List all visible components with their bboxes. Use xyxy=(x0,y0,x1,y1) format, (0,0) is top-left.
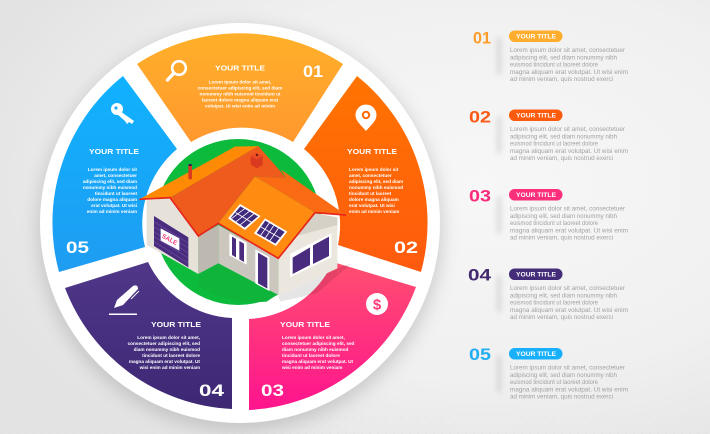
green lawn circle xyxy=(155,139,321,305)
body 03: tincidunt ut laoreet dolore xyxy=(282,353,340,358)
house illustration xyxy=(139,146,352,302)
text 02: Lorem ipsum dolor sit amet, consectetuer xyxy=(510,126,625,133)
front door xyxy=(255,249,269,291)
text 05 xyxy=(510,364,628,401)
right wall xyxy=(278,213,337,296)
text 03 xyxy=(510,206,628,242)
number 03: 03 xyxy=(261,381,284,400)
body 02 xyxy=(349,167,403,214)
garage door xyxy=(154,216,188,267)
number 04: 04 xyxy=(199,381,225,400)
dotted texture xyxy=(0,416,710,434)
body 04: consectetuer adipiscing elit, sed xyxy=(128,341,200,346)
number 02: 02 xyxy=(394,238,418,257)
vent pipe xyxy=(188,164,192,179)
text 02 xyxy=(510,126,628,162)
body 01: Lorem ipsum dolor sit amet, xyxy=(209,80,271,84)
divider shadow 02 xyxy=(498,117,500,153)
divider shadow 05 xyxy=(498,356,500,392)
text 05: Lorem ipsum dolor sit amet, consectetuer xyxy=(510,364,625,372)
divider shadow 01 xyxy=(498,38,500,74)
text 02: euismod tincidunt ut laoreet dolore xyxy=(510,141,599,148)
icon: dollar coin: $ xyxy=(373,296,382,314)
text 05: adipiscing elit, sed diam nonummy nibh xyxy=(510,372,618,379)
house shadow xyxy=(278,263,352,302)
front wall xyxy=(218,225,278,295)
roof right flap xyxy=(255,169,346,215)
pill 02 xyxy=(509,110,562,121)
segment 03 xyxy=(249,262,416,410)
icon: magnifier xyxy=(168,61,186,80)
number 05: 05 xyxy=(66,238,89,257)
sale sign xyxy=(160,228,179,251)
body 04: wisi enim ad minim veniam xyxy=(139,365,200,370)
body 02: erat volutpat. Ut wisi xyxy=(349,203,395,208)
text 02: magna aliquam erat volutpat. Ut wisi enim xyxy=(510,148,628,155)
item 01 xyxy=(473,28,628,83)
body 04: tincidunt ut laoreet dolore xyxy=(142,353,200,358)
item 02 xyxy=(469,108,628,162)
body 02: amet, consectetuer xyxy=(349,173,392,178)
number 01: 01 xyxy=(303,62,323,81)
text 03: magna aliquam erat volutpat. Ut wisi enim xyxy=(510,227,628,234)
text 03: ad minim veniam, quis nostrud exerci xyxy=(510,235,613,242)
front window xyxy=(229,233,247,265)
icon: dollar coin xyxy=(366,293,388,315)
wedge 02 xyxy=(304,76,428,272)
pill 04 xyxy=(509,268,562,280)
body 01 xyxy=(198,80,282,108)
divider shadow 04 xyxy=(498,276,500,312)
segment 01 xyxy=(137,33,343,142)
body 05: enim ad minim veniam xyxy=(87,209,137,214)
text 01: Lorem ipsum dolor sit amet, consectetuer xyxy=(510,47,625,54)
divider shadow 03 xyxy=(498,197,500,233)
pill 01: YOUR TITLE xyxy=(516,34,556,40)
roof red edge xyxy=(139,198,346,258)
text 02: ad minim veniam, quis nostrud exerci xyxy=(510,155,613,162)
text 03: Lorem ipsum dolor sit amet, consectetuer xyxy=(510,206,625,212)
body 01: volutpat. Ut wisi enim ad minim xyxy=(205,104,275,108)
body 03: consectetuer adipiscing elit, sed xyxy=(282,341,355,346)
segment 05 xyxy=(52,76,177,272)
body 05: adipiscing elit, sed diam xyxy=(83,179,137,184)
text 04 xyxy=(510,285,628,321)
body 04 xyxy=(128,335,200,370)
text 05: magna aliquam erat volutpat. Ut wisi enim xyxy=(510,386,628,393)
text 01: adipiscing elit, sed diam nonummy nibh xyxy=(510,54,618,61)
sale sign: SALE xyxy=(160,233,178,247)
pill 03: YOUR TITLE xyxy=(516,193,556,199)
text 01: ad minim veniam, quis nostrud exerci xyxy=(510,76,613,83)
number 02: 02 xyxy=(469,108,491,126)
white disc xyxy=(40,23,440,423)
text 01: euismod tincidunt ut laoreet dolore xyxy=(510,62,599,69)
roof front gable xyxy=(218,177,315,258)
text 01: magna aliquam erat volutpat. Ut wisi enim xyxy=(510,69,628,76)
text 04: Lorem ipsum dolor sit amet, consectetuer xyxy=(510,285,625,292)
lawn path highlight xyxy=(198,263,277,302)
disc shadow xyxy=(38,27,442,431)
wedge 01 xyxy=(137,33,343,142)
number 01: 01 xyxy=(473,28,491,48)
body 05: amet, consectetuer xyxy=(94,173,137,178)
solar panel left xyxy=(228,204,261,230)
side wall xyxy=(198,225,218,274)
body 05: Lorem ipsum dolor sit xyxy=(88,167,137,172)
body 02: nonummy nibh euismod xyxy=(349,185,403,190)
body 02: tincidunt ut laoreet xyxy=(349,191,392,196)
item 05 xyxy=(469,345,628,401)
body 05 xyxy=(83,167,137,214)
text 03: adipiscing elit, sed diam nonummy nibh xyxy=(510,213,618,220)
number 03: 03 xyxy=(469,186,491,206)
text 04: adipiscing elit, sed diam nonummy nibh xyxy=(510,292,618,299)
wedge 05 xyxy=(52,76,177,272)
title 02: YOUR TITLE xyxy=(347,147,397,156)
text 01 xyxy=(510,47,628,83)
pill 02: YOUR TITLE xyxy=(516,114,556,120)
body 03: diam nonummy nibh euismod xyxy=(282,347,349,352)
body 05: erat volutpat. Ut wisi xyxy=(91,203,137,208)
item 04 xyxy=(468,266,628,321)
body 05: tincidunt ut laoreet xyxy=(95,191,137,196)
number 05: 05 xyxy=(469,345,491,364)
chimney xyxy=(251,153,263,168)
pill 04: YOUR TITLE xyxy=(516,272,556,278)
right gable shade xyxy=(297,213,337,236)
side list xyxy=(468,28,628,401)
icon: pen xyxy=(109,285,139,315)
body 03: wisi enim ad minim veniam xyxy=(281,365,342,370)
body 03: Lorem ipsum dolor sit amet, xyxy=(282,335,345,340)
title 04: YOUR TITLE xyxy=(151,320,201,329)
icon: key xyxy=(111,103,134,124)
segment 04 xyxy=(65,262,232,409)
pill 03 xyxy=(509,189,562,200)
segment 02 xyxy=(304,76,428,272)
body 05: dolore magna aliquam xyxy=(87,197,137,202)
body 04: magna aliquam erat volutpat. Ut xyxy=(129,359,200,364)
icon: location pin xyxy=(356,104,376,131)
right window xyxy=(290,233,331,277)
wedge 04 xyxy=(65,262,232,409)
body 03: magna aliquam erat volutpat. Ut xyxy=(282,359,354,364)
number 04: 04 xyxy=(468,266,492,284)
body 02: adipiscing elit, sed diam xyxy=(349,179,403,184)
roof left strip xyxy=(139,146,258,199)
text 05: euismod tincidunt ut laoreet dolore xyxy=(510,379,599,386)
body 01: consectetuer adipiscing elit, sed diam xyxy=(198,86,282,90)
body 01: nonummy nibh euismod tincidunt ut xyxy=(200,92,281,96)
title 03: YOUR TITLE xyxy=(280,320,330,329)
title 05: YOUR TITLE xyxy=(89,147,139,156)
text 05: ad minim veniam, quis nostrud exerci xyxy=(510,394,613,401)
text 04: euismod tincidunt ut laoreet dolore xyxy=(510,300,599,307)
garage wall xyxy=(147,198,198,274)
body 04: diam nonummy nibh euismod xyxy=(134,347,200,352)
text 02: adipiscing elit, sed diam nonummy nibh xyxy=(510,133,618,140)
pill 05 xyxy=(509,348,562,360)
body 01: laoreet dolore magna aliquam erat xyxy=(202,98,279,102)
body 02: Lorem ipsum dolor sit xyxy=(349,167,399,172)
pill 05: YOUR TITLE xyxy=(516,352,556,358)
body 02: enim ad minim veniam xyxy=(349,209,399,214)
wedge 03 xyxy=(249,262,416,410)
body 02: dolore magna aliquam xyxy=(349,197,399,202)
body 05: nonummy nibh euismod xyxy=(83,185,137,190)
item 03 xyxy=(469,186,628,242)
text 03: euismod tincidunt ut laoreet dolore xyxy=(510,220,599,227)
text 04: ad minim veniam, quis nostrud exerci xyxy=(510,314,613,321)
body 04: Lorem ipsum dolor sit amet, xyxy=(137,335,200,340)
pill 01 xyxy=(509,30,562,42)
roof main face xyxy=(170,146,287,236)
body 03 xyxy=(281,335,355,370)
title 01: YOUR TITLE xyxy=(215,64,265,72)
solar panel right xyxy=(254,218,287,246)
text 04: magna aliquam erat volutpat. Ut wisi enim xyxy=(510,307,628,314)
